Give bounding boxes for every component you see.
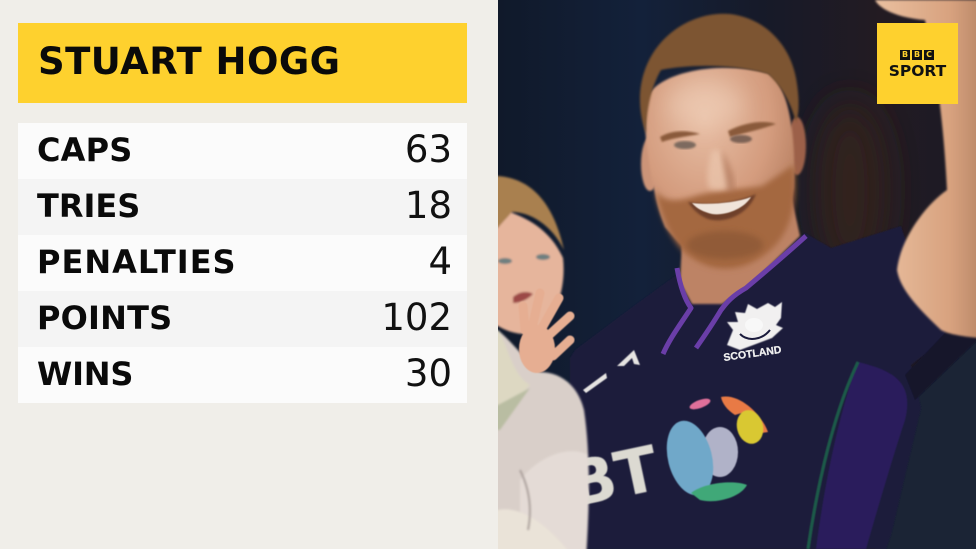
row: caps: CAPS <box>37 131 133 169</box>
child's head <box>470 176 564 334</box>
shirt sponsor marks: kit maker <box>583 350 640 393</box>
row: caps <box>18 123 467 179</box>
row: tries: 18 <box>405 184 452 227</box>
photo: player with child <box>498 0 976 549</box>
player's ears <box>641 117 806 191</box>
row: wins: WINS <box>37 355 133 393</box>
stats table <box>18 123 467 403</box>
photo background <box>498 0 976 549</box>
title banner <box>18 23 467 103</box>
row: penalties: PENALTIES <box>37 243 237 281</box>
player's neck <box>680 190 800 304</box>
row: points <box>18 291 467 347</box>
row: penalties: 4 <box>428 240 452 283</box>
row: wins <box>18 347 467 403</box>
logo: BBC blocks <box>900 50 934 60</box>
row: tries: TRIES <box>37 187 140 225</box>
player's eyes and brows <box>660 122 776 192</box>
child's coat <box>470 330 589 549</box>
logo: BBC blocks: B <box>902 50 908 59</box>
chin shading <box>687 231 763 259</box>
row: points: POINTS <box>37 299 172 337</box>
purple collar <box>663 236 806 354</box>
player's smile <box>688 194 756 220</box>
player's shirt <box>570 226 976 549</box>
row: penalties <box>18 235 467 291</box>
BT wordmark: BT <box>562 432 665 522</box>
Scotland crest: SCOTLAND <box>723 344 783 364</box>
player's hair <box>640 14 799 134</box>
player's raised arm <box>875 0 976 340</box>
BT logo <box>659 396 768 501</box>
logo: BBC blocks: B <box>914 50 920 59</box>
row: caps: 63 <box>405 128 452 171</box>
forehead highlight <box>667 83 743 127</box>
logo: SPORT wordmark: SPORT <box>889 62 946 80</box>
child's hand <box>523 293 570 369</box>
player's face <box>645 68 794 266</box>
row: tries <box>18 179 467 235</box>
BBC Sport logo <box>877 23 958 104</box>
Scotland crest <box>723 302 783 364</box>
logo: BBC blocks: C <box>926 50 932 59</box>
row: wins: 30 <box>405 352 452 395</box>
row: points: 102 <box>381 296 452 339</box>
player's beard <box>655 165 795 269</box>
title banner: STUART HOGG <box>38 40 340 83</box>
